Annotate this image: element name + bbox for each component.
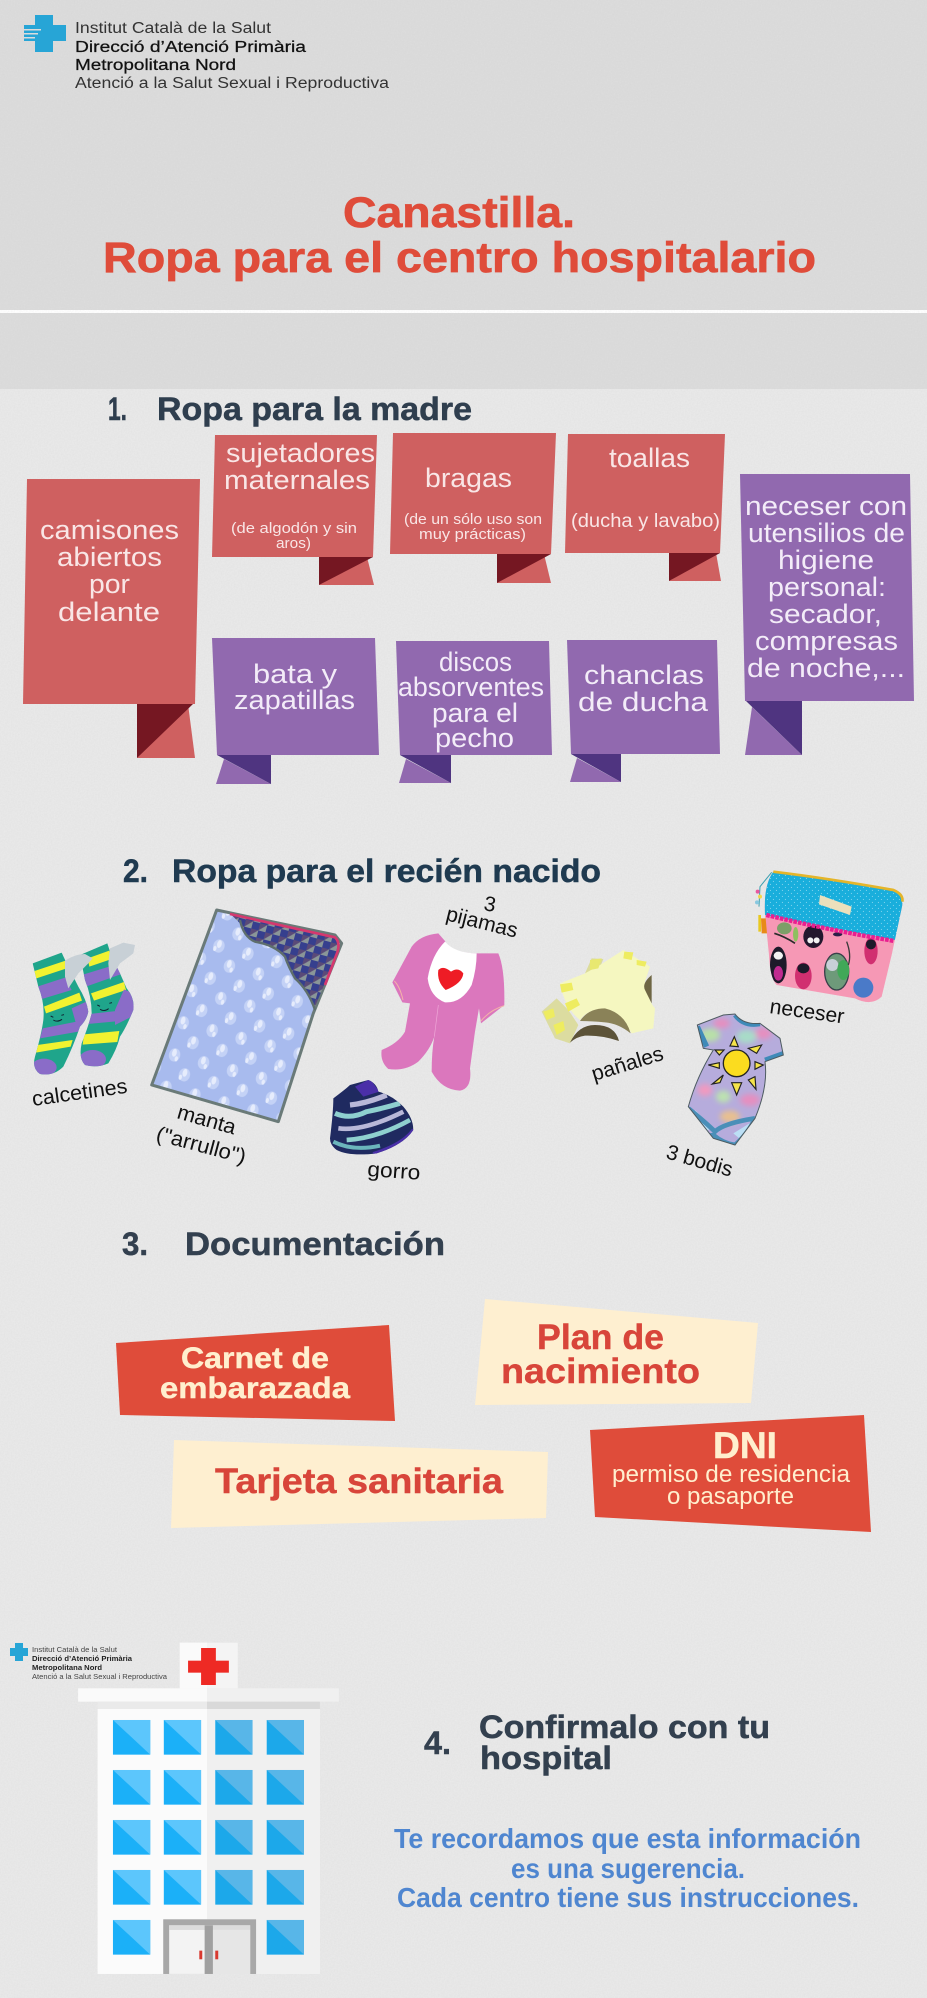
panel: camisones ribbon (23, 479, 200, 758)
logo text: Metropolitana Nord (75, 57, 236, 74)
logo text: Atenció a la Salut Sexual i Reproductiva (75, 75, 389, 92)
heading: section 1: Ropa para la madre (157, 391, 472, 427)
logo: Institut Català de la Salut (24, 15, 389, 92)
logo: small Institut Català de la Salut (10, 1643, 168, 1681)
building body (98, 1709, 320, 1974)
panel: camisones ribbon: delante (58, 597, 160, 627)
label: 3 bodis: 3 bodis (664, 1141, 735, 1182)
panel: bata y zapatillas ribbon: bata y (253, 659, 338, 689)
heading: section 2: Ropa para el recién nacido (172, 853, 601, 889)
panel: sujetadores ribbon: maternales (224, 465, 370, 495)
title: Canastilla. (343, 189, 575, 237)
text block: reminder (394, 1823, 861, 1913)
small logo text: Atenció a la Salut Sexual i Reproductiva (32, 1672, 168, 1681)
icon: pink pajama (381, 933, 504, 1091)
panel: sujetadores ribbon: (de algodón y sin (231, 520, 357, 537)
logo text: Institut Català de la Salut (75, 20, 272, 37)
panel: discos absorventes ribbon: discos (439, 647, 512, 677)
label: manta: manta (175, 1101, 239, 1139)
small logo text: Direcció d’Atenció Primària (32, 1654, 133, 1663)
icon: striped hat (330, 1080, 414, 1154)
icon: sun bodysuit (687, 1013, 787, 1147)
panel: neceser con utensilios ribbon: neceser con (745, 491, 907, 521)
logo text: Direcció d’Atenció Primària (75, 39, 306, 56)
panel: discos absorventes ribbon: pecho (435, 723, 514, 753)
roof (78, 1688, 339, 1709)
icon: health cross (24, 15, 66, 52)
icon: diapers (542, 950, 655, 1043)
heading: section 4: 4. (424, 1725, 451, 1761)
label: gorro: gorro (367, 1158, 421, 1185)
heading: section 1: 1. (108, 391, 127, 427)
card: Tarjeta sanitaria (171, 1440, 548, 1528)
card: Tarjeta sanitaria: Tarjeta sanitaria (215, 1462, 504, 1501)
panel: chanclas de ducha ribbon: de ducha (578, 687, 709, 717)
icon: small cross (10, 1643, 28, 1661)
panel: sujetadores ribbon: sujetadores (226, 438, 375, 468)
panel: toallas ribbon (565, 434, 725, 581)
panel: neceser con utensilios ribbon: secador, (769, 599, 882, 629)
card: Plan de nacimiento (475, 1299, 758, 1405)
small logo text: Metropolitana Nord (32, 1663, 102, 1672)
panel: discos absorventes ribbon (396, 641, 552, 783)
panel: bata y zapatillas ribbon (212, 638, 379, 784)
heading: section 4: Confirmalo con tu (479, 1709, 770, 1745)
panel: sujetadores ribbon: aros) (276, 535, 311, 552)
title: Ropa para el centro hospitalario (103, 234, 816, 282)
label: pijamas: pijamas (444, 903, 520, 943)
label: 3: 3 (482, 892, 498, 917)
text block: reminder: Te recordamos que esta información (394, 1823, 861, 1854)
text block: reminder: Cada centro tiene sus instrucciones. (397, 1882, 859, 1913)
icon: socks (32, 942, 135, 1074)
card: DNI: o pasaporte (667, 1483, 794, 1510)
heading: section 2: 2. (123, 853, 148, 889)
panel: discos absorventes ribbon: para el (432, 698, 518, 728)
card: Carnet de embarazada: Carnet de (181, 1342, 329, 1375)
panel: bragas ribbon: muy prácticas) (419, 526, 526, 543)
icon: blanket (152, 910, 342, 1122)
panel: chanclas de ducha ribbon (567, 640, 720, 782)
panel: camisones ribbon: camisones (40, 515, 179, 545)
panel: chanclas de ducha ribbon: chanclas (584, 660, 704, 690)
panel: camisones ribbon: por (89, 569, 130, 599)
panel: discos absorventes ribbon: absorventes (398, 672, 544, 702)
card: DNI (590, 1415, 871, 1532)
card: Carnet de embarazada: embarazada (160, 1372, 350, 1405)
panel: toallas ribbon: toallas (609, 443, 690, 473)
panel: camisones ribbon: abiertos (57, 542, 162, 572)
heading: section 4: hospital (480, 1740, 612, 1776)
heading: section 4 (424, 1709, 770, 1776)
card: Plan de nacimiento: nacimiento (501, 1352, 700, 1391)
card: DNI: permiso de residencia (612, 1461, 851, 1488)
heading: section 3: Documentación (185, 1226, 445, 1262)
panel: neceser con utensilios ribbon: utensilios de (748, 518, 905, 548)
panel: bata y zapatillas ribbon: zapatillas (234, 685, 355, 715)
panel: neceser con utensilios ribbon (740, 474, 914, 755)
icon: owl toiletry bag (755, 868, 908, 1008)
panel: bragas ribbon: (de un sólo uso son (404, 511, 542, 528)
panel: neceser con utensilios ribbon: personal: (768, 572, 886, 602)
card: DNI: DNI (713, 1425, 777, 1466)
card: Carnet de embarazada (116, 1325, 395, 1421)
label: arrullo: ("arrullo") (154, 1123, 249, 1169)
small logo text (32, 1645, 168, 1681)
panel: bragas ribbon (390, 433, 556, 583)
logo text (75, 20, 389, 92)
panel: sujetadores ribbon (212, 435, 377, 585)
panel: neceser con utensilios ribbon: higiene (778, 545, 874, 575)
label: calcetines: calcetines (30, 1075, 129, 1111)
panel: neceser con utensilios ribbon: de noche,... (747, 653, 905, 683)
label: neceser: neceser (768, 995, 846, 1028)
card: Plan de nacimiento: Plan de (537, 1318, 664, 1357)
sign with red cross (180, 1643, 238, 1688)
small logo text: Institut Català de la Salut (32, 1645, 118, 1654)
text block: reminder: es una sugerencia. (511, 1853, 745, 1884)
illustration: hospital building (78, 1643, 339, 1974)
heading: section 3: 3. (122, 1226, 148, 1262)
windows (113, 1720, 304, 1955)
label: pañales: pañales (589, 1042, 666, 1086)
panel: bragas ribbon: bragas (425, 463, 512, 493)
panel: toallas ribbon: (ducha y lavabo) (571, 511, 720, 532)
panel: neceser con utensilios ribbon: compresas (755, 626, 898, 656)
title (103, 189, 816, 282)
door (163, 1919, 256, 1974)
